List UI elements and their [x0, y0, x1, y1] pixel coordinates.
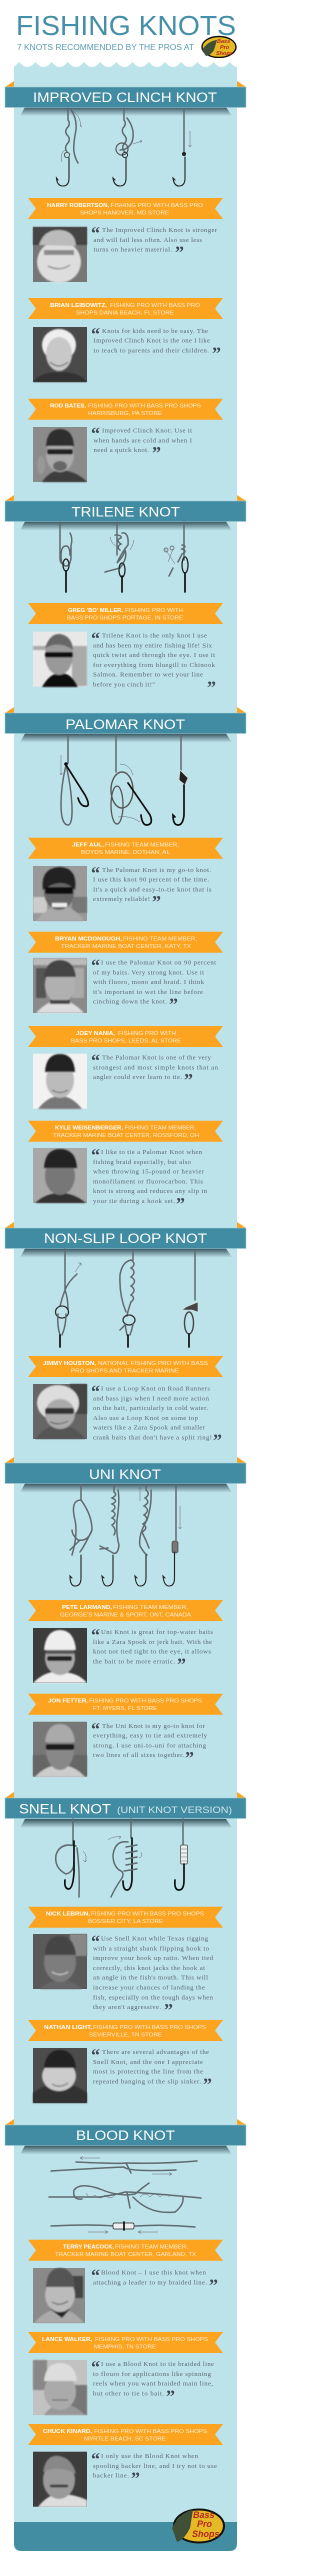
quote: Terry Peacock: TERRY PEACOCK,: [63, 2245, 115, 2251]
quote: Chuck Kinard: FISHING PRO WITH BASS PRO SHOPS: [94, 2429, 208, 2435]
quote: Pete Larmand: PETE LARMAND,: [62, 1605, 113, 1611]
quote: Pete Larmand: [28, 1600, 223, 1683]
photo: [33, 1054, 87, 1109]
ribbon heading: IMPROVED CLINCH KNOT: [33, 90, 217, 105]
photo: [33, 2452, 87, 2507]
quote: Joey Nania: [28, 1026, 223, 1109]
quote: Brian Leibowitz: BRIAN LEIBOWITZ,: [50, 303, 108, 309]
quote: Jon Fetter: FT. MYERS, FL STORE: [93, 1706, 158, 1712]
ribbon heading: [5, 495, 246, 530]
quote: Pete Larmand: Uni Knot is great for top-water baits: [101, 1629, 213, 1636]
quote: Nathan Light: [28, 2020, 223, 2103]
quote: Jeff Aul: FISHING TEAM MEMBER,: [105, 843, 179, 849]
quote: Nathan Light: “: [91, 2045, 100, 2065]
ribbon heading: [5, 1792, 246, 1828]
quote: Joey Nania: JOEY NANIA,: [76, 1031, 116, 1037]
quote: Jeff Aul: extremely reliable!: [93, 896, 150, 903]
quote: Lance Walker: FISHING PRO WITH BASS PRO SHOPS: [95, 2337, 209, 2343]
quote: Chuck Kinard: spooling backer line, and I try not to use: [93, 2463, 217, 2470]
photo: [33, 2048, 87, 2103]
quote: Jeff Aul: It's a quick and easy-to-tie knot that is: [93, 886, 212, 893]
quote: Bryan McDonough: BRYAN MCDONOUGH,: [55, 937, 123, 943]
quote: Jeff Aul: ”: [152, 892, 161, 912]
quote: Lance Walker: “: [91, 2357, 100, 2377]
knot illustration: [60, 522, 188, 592]
quote: Brian Leibowitz: to teach to parents and their children.: [94, 347, 209, 354]
photo: [33, 1628, 87, 1683]
quote: Nathan Light: NATHAN LIGHT,: [44, 2025, 93, 2031]
quote: Bryan McDonough: cinching down the knot.: [93, 999, 167, 1006]
quote: Joey Nania: The Palomar Knot is one of the very: [102, 1054, 212, 1062]
quote: Harry Robertson: HARRY ROBERTSON,: [47, 203, 110, 209]
quote: Bryan McDonough: “: [91, 956, 100, 976]
quote: Rod Bates: “: [91, 424, 100, 444]
photo: [33, 2360, 87, 2415]
quote: Brian Leibowitz: ”: [212, 343, 221, 363]
quote: Greg Bo Miller: before you cinch it!": [93, 682, 155, 688]
quote: Nick Lebrun: with a straight shank flipping hook to: [93, 1945, 210, 1952]
quote: Harry Robertson: [28, 198, 223, 283]
quote: Jeff Aul: “: [91, 863, 100, 883]
quote: Harry Robertson: and will fail less often. Also use less: [94, 237, 202, 244]
quote: Kyle Weisenberger: when throwing 15-pound or heavier: [93, 1169, 205, 1176]
quote: Bryan McDonough: ”: [169, 995, 178, 1015]
photo: [33, 2268, 85, 2323]
quote: Jimmy Houston: crank baits that don't have a split ring!: [93, 1434, 212, 1442]
quote: Jimmy Houston: NATIONAL FISHING PRO WITH BASS: [98, 1361, 209, 1367]
quote: Nick Lebrun: they aren't aggressive.: [93, 2004, 161, 2011]
quote: Nick Lebrun: an angle in the fish's mouth. This will: [93, 1975, 208, 1982]
quote: Bryan McDonough: with fluoro, mono and braid. I think: [93, 979, 205, 986]
ribbon heading: [5, 1457, 246, 1492]
quote: Rod Bates: need a quick knot.: [94, 447, 149, 454]
quote: Lance Walker: LANCE WALKER,: [42, 2337, 93, 2343]
quote: Nick Lebrun: BOSSIER CITY, LA STORE: [88, 1919, 164, 1925]
quote: Nick Lebrun: improve your hook up ratio. When tied: [93, 1955, 214, 1962]
quote: Jimmy Houston: ”: [213, 1430, 222, 1450]
quote: Chuck Kinard: [28, 2424, 223, 2507]
quote: Kyle Weisenberger: I like to tie a Palomar Knot when: [101, 1149, 203, 1156]
quote: Jeff Aul: [28, 838, 223, 921]
quote: Joey Nania: “: [91, 1050, 100, 1070]
quote: Kyle Weisenberger: knot is strong and reduces any slip in: [93, 1188, 208, 1195]
knot illustration: [56, 1819, 187, 1897]
quote: Pete Larmand: “: [91, 1625, 100, 1645]
section: Non-Slip Loop Knot: [5, 1222, 246, 1450]
quote: Nick Lebrun: increase your chances of landing the: [93, 1984, 205, 1992]
quote: Nathan Light: repeated banging of the slip sinker.: [93, 2078, 201, 2085]
quote: Rod Bates: Improved Clinch Knot: Use it: [102, 428, 192, 434]
quote: Jeff Aul: The Palomar Knot is my go-to knot.: [102, 867, 211, 874]
quote: Nick Lebrun: [28, 1907, 223, 2020]
ribbon heading: [5, 707, 246, 742]
quote: Bryan McDonough: of my baits. Very strong knot. Use it: [93, 969, 204, 976]
quote: Kyle Weisenberger: monofilament or fluorocarbon. This: [93, 1178, 203, 1185]
quote: Greg Bo Miller: ”: [207, 678, 216, 698]
footer band: [14, 2522, 237, 2551]
panel: light blue background: [14, 62, 237, 2551]
logo: Bass Pro Shops footer: [172, 2510, 224, 2542]
quote: Nick Lebrun: NICK LEBRUN,: [46, 1912, 91, 1918]
quote: Jimmy Houston: [28, 1356, 223, 1450]
quote: Nick Lebrun: FISHING PRO WITH BASS PRO SHOPS: [91, 1912, 205, 1918]
quote: Harry Robertson: “: [91, 223, 100, 243]
quote: Terry Peacock: FISHING TEAM MEMBER,: [115, 2245, 188, 2251]
quote: Nathan Light: Snell Knot, and the one I appreciate: [93, 2059, 203, 2066]
quote: Jon Fetter: FISHING PRO WITH BASS PRO SHOPS: [89, 1699, 203, 1705]
quote: Jon Fetter: “: [91, 1719, 100, 1739]
quote: Nick Lebrun: ”: [164, 2000, 173, 2020]
logo: Bass Pro Shops header: Shops: [216, 51, 233, 57]
quote: Kyle Weisenberger: your tie during a hook set.: [93, 1198, 175, 1205]
quote: Chuck Kinard: CHUCK KINARD,: [43, 2429, 93, 2435]
quote: Lance Walker: [28, 2332, 223, 2415]
logo: Bass Pro Shops footer: Pro: [197, 2519, 213, 2529]
quote: Kyle Weisenberger: KYLE WEISENBERGER,: [55, 1126, 124, 1132]
ribbon heading: (UNIT KNOT VERSION): [117, 1805, 232, 1816]
quote: Chuck Kinard: MYRTLE BEACH, SC STORE: [84, 2436, 167, 2442]
section: Uni Knot: [5, 1457, 246, 1777]
quote: Pete Larmand: FISHING TEAM MEMBER,: [113, 1605, 188, 1611]
ribbon heading: PALOMAR KNOT: [66, 717, 185, 732]
quote: Bryan McDonough: FISHING TEAM MEMBER,: [123, 937, 197, 943]
quote: Jon Fetter: The Uni Knot is my go-to knot for: [102, 1723, 206, 1730]
quote: Rod Bates: [28, 399, 223, 482]
photo: [33, 1384, 87, 1439]
quote: Terry Peacock: “: [91, 2266, 100, 2286]
quote: Rod Bates: ROD BATES,: [50, 404, 87, 410]
quote: Lance Walker: but other to tie to bait.: [93, 2390, 164, 2397]
photo: [33, 1934, 87, 1989]
quote: Greg Bo Miller: for everything from bluegill to Chinook: [93, 662, 216, 669]
quote: Lance Walker: MEMPHIS, TN STORE: [94, 2344, 157, 2350]
photo: [33, 427, 87, 482]
quote: Greg Bo Miller: BASS PRO SHOPS PORTAGE, IN STORE: [67, 615, 184, 621]
quote: Lance Walker: ”: [166, 2386, 175, 2406]
logo: Bass Pro Shops header: [202, 36, 236, 58]
logo: Bass Pro Shops header: Bass: [217, 39, 230, 45]
quote: Nathan Light: ”: [203, 2074, 212, 2094]
quote: Joey Nania: ”: [184, 1070, 193, 1090]
logo: Bass Pro Shops footer: Shops: [192, 2529, 220, 2539]
quote: Kyle Weisenberger: “: [91, 1145, 100, 1165]
photo: [33, 958, 87, 1013]
section: Improved Clinch Knot: [5, 81, 246, 482]
quote: Joey Nania: FISHING PRO WITH: [118, 1031, 176, 1037]
quote: Brian Leibowitz: FISHING PRO WITH BASS PRO: [110, 303, 200, 309]
quote: Kyle Weisenberger: fishing braid especially, but also: [93, 1159, 192, 1166]
quote: Rod Bates: when hands are cold and when I: [94, 437, 192, 444]
quote: Greg Bo Miller: [28, 603, 223, 698]
quote: Lance Walker: reels when you want braided main line,: [93, 2381, 213, 2388]
quote: Jon Fetter: [28, 1694, 223, 1777]
quote: Kyle Weisenberger: FISHING TEAM MEMBER,: [124, 1126, 196, 1132]
quote: Chuck Kinard: I only use the Blood Knot when: [101, 2453, 199, 2460]
quote: Lance Walker: to flouro for applications like spinning: [93, 2371, 212, 2378]
quote: Greg Bo Miller: quick twist and through the eye. I use it: [93, 652, 215, 659]
quote: Greg Bo Miller: GREG 'BO' MILLER,: [68, 608, 124, 614]
quote: Brian Leibowitz: “: [91, 324, 100, 344]
quote: Joey Nania: angler could ever learn to tie.: [93, 1074, 182, 1081]
quote: Harry Robertson: The Improved Clinch Knot is stronger: [102, 227, 218, 234]
quote: Nathan Light: SEVIERVILLE, TN STORE: [89, 2032, 163, 2038]
subtitle: 7 KNOTS RECOMMENDED BY THE PROS AT: [17, 43, 194, 52]
knot illustration: [60, 735, 188, 825]
quote: Brian Leibowitz: Improved Clinch Knot is the one I like: [94, 338, 210, 345]
photo: [33, 327, 87, 382]
quote: Harry Robertson: FISHING PRO WITH BASS PRO: [110, 203, 203, 209]
section: Blood Knot: [5, 2119, 246, 2507]
section: Snell Knot: [5, 1792, 246, 2103]
quote: Kyle Weisenberger: TRACKER MARINE BOAT CENTER, ROSSFORD, OH: [53, 1133, 199, 1139]
quote: Terry Peacock: [28, 2240, 223, 2323]
quote: Chuck Kinard: “: [91, 2449, 100, 2469]
ribbon heading: [5, 1222, 246, 1258]
quote: Pete Larmand: like a Zara Spook or jerk bait. With the: [93, 1639, 212, 1646]
quote: Rod Bates: FISHING PRO WITH BASS PRO SHOPS: [88, 404, 202, 410]
quote: Joey Nania: strongest and most simple knots that an: [93, 1064, 219, 1071]
quote: Bryan McDonough: [28, 932, 223, 1015]
quote: Jimmy Houston: on the bait, particularly in cold water.: [93, 1405, 208, 1412]
logo: Bass Pro Shops footer: Bass: [193, 2510, 215, 2520]
quote: Jon Fetter: strong. I use uni-to-uni for attaching: [93, 1742, 207, 1749]
scalloped top edge: [3, 58, 246, 67]
quote: Jon Fetter: JON FETTER,: [48, 1699, 89, 1705]
quote: Jon Fetter: ”: [185, 1748, 194, 1768]
ribbon heading: NON-SLIP LOOP KNOT: [44, 1231, 207, 1246]
quote: Joey Nania: BASS PRO SHOPS, LEEDS, AL STORE: [71, 1038, 182, 1044]
section: Trilene Knot: [5, 495, 246, 698]
quote: Pete Larmand: ”: [177, 1654, 186, 1674]
ribbon heading: SNELL KNOT: [19, 1802, 111, 1817]
quote: Nick Lebrun: fish, especially on the tough days when: [93, 1994, 214, 2001]
quote: Brian Leibowitz: [28, 298, 223, 382]
knot illustration: [56, 108, 192, 186]
quote: Jimmy Houston: waters like a Zara Spook and smaller: [93, 1425, 206, 1432]
quote: Jeff Aul: I use this knot 90 percent of the time.: [93, 877, 209, 884]
photo: [33, 1148, 87, 1203]
quote: Chuck Kinard: ”: [131, 2469, 140, 2489]
section: Palomar Knot: [5, 707, 246, 1214]
logo: Bass Pro Shops header: Pro: [220, 45, 230, 51]
quote: Terry Peacock: TRACKER MARINE BOAT CENTER, GARLAND, TX: [55, 2252, 197, 2258]
quote: Bryan McDonough: TRACKER MARINE BOAT CENTER, KATY, TX: [61, 944, 192, 950]
quote: Jimmy Houston: and bass jigs when I need more action: [93, 1395, 210, 1402]
quote: Bryan McDonough: I use the Palomar Knot on 90 percent: [101, 960, 216, 966]
quote: Jon Fetter: two lines of all sizes together.: [93, 1752, 184, 1759]
quote: Greg Bo Miller: Trilene Knot is the only knot I use: [102, 632, 207, 640]
knot illustration: [70, 1485, 182, 1586]
quote: Jeff Aul: BOYDS MARINE, DOTHAN, AL: [81, 850, 170, 856]
ribbon heading: BLOOD KNOT: [76, 2128, 175, 2143]
quote: Lance Walker: I use a Blood Knot to tie braided line: [101, 2361, 214, 2368]
knot illustration: [56, 1249, 198, 1347]
knot illustration: [49, 2156, 201, 2234]
quote: Terry Peacock: Blood Knot – I use this knot when: [101, 2270, 207, 2276]
quote: Nick Lebrun: Use Snell Knot while Texas rigging: [101, 1936, 209, 1942]
quote: Kyle Weisenberger: ”: [176, 1194, 185, 1214]
quote: Jeff Aul: JEFF AUL,: [72, 843, 105, 849]
photo: [33, 1722, 87, 1777]
ribbon heading: TRILENE KNOT: [72, 505, 180, 520]
quote: Nathan Light: most is protecting the line from the: [93, 2069, 203, 2076]
quote: Greg Bo Miller: “: [91, 628, 100, 648]
quote: Jimmy Houston: JIMMY HOUSTON,: [43, 1361, 97, 1367]
photo: [33, 632, 87, 687]
quote: Terry Peacock: attaching a leader to my braided line.: [93, 2279, 207, 2286]
quote: Nick Lebrun: “: [91, 1932, 100, 1952]
quote: Jimmy Houston: Also use a Loop Knot on some top: [93, 1415, 199, 1422]
quote: Pete Larmand: knot not tied tight to the eye, it allows: [93, 1649, 211, 1656]
quote: Nathan Light: FISHING PRO WITH BASS PRO SHOPS: [93, 2025, 207, 2031]
quote: Brian Leibowitz: SHOPS DANIA BEACH, FL STORE: [76, 310, 175, 316]
title: FISHING KNOTS: [16, 10, 236, 41]
quote: Greg Bo Miller: FISHING PRO WITH: [125, 608, 183, 614]
quote: Jon Fetter: everything, easy to tie and extremely: [93, 1733, 208, 1740]
quote: Jimmy Houston: PRO SHOPS AND TRACKER MARINE: [71, 1368, 180, 1374]
quote: Pete Larmand: GEORGE'S MARINE & SPORT, ONT, CANADA: [60, 1612, 192, 1618]
quote: Nick Lebrun: correctly, this knot jacks the hook at: [93, 1965, 205, 1972]
quote: Greg Bo Miller: Salmon. Remember to wet your line: [93, 672, 203, 679]
quote: Chuck Kinard: backer line.: [93, 2473, 129, 2480]
quote: Nathan Light: There are several advantages of the: [102, 2049, 209, 2056]
ribbon heading: UNI KNOT: [89, 1467, 161, 1482]
quote: Harry Robertson: turns on heavier material.: [94, 247, 172, 254]
quote: Harry Robertson: ”: [175, 243, 184, 263]
quote: Brian Leibowitz: Knots for kids need to be easy. The: [102, 328, 208, 335]
photo: [33, 866, 87, 921]
quote: Rod Bates: ”: [152, 443, 161, 463]
quote: Pete Larmand: the bait to be more erratic.: [93, 1658, 175, 1665]
quote: Greg Bo Miller: and has been my entire fishing life! Six: [93, 642, 213, 649]
photo: [33, 227, 87, 283]
quote: Harry Robertson: SHOPS HANOVER, MD STORE: [80, 210, 170, 216]
ribbon heading: [5, 2119, 246, 2154]
quote: Kyle Weisenberger: [28, 1121, 223, 1214]
quote: Terry Peacock: ”: [209, 2275, 218, 2295]
ribbon heading: [5, 81, 246, 116]
quote: Rod Bates: HARRISBURG, PA STORE: [88, 411, 163, 417]
quote: Bryan McDonough: it's important to wet the line before: [93, 989, 203, 996]
quote: Jimmy Houston: I use a Loop Knot on Road Runners: [101, 1386, 210, 1392]
quote: Jimmy Houston: “: [91, 1382, 100, 1402]
